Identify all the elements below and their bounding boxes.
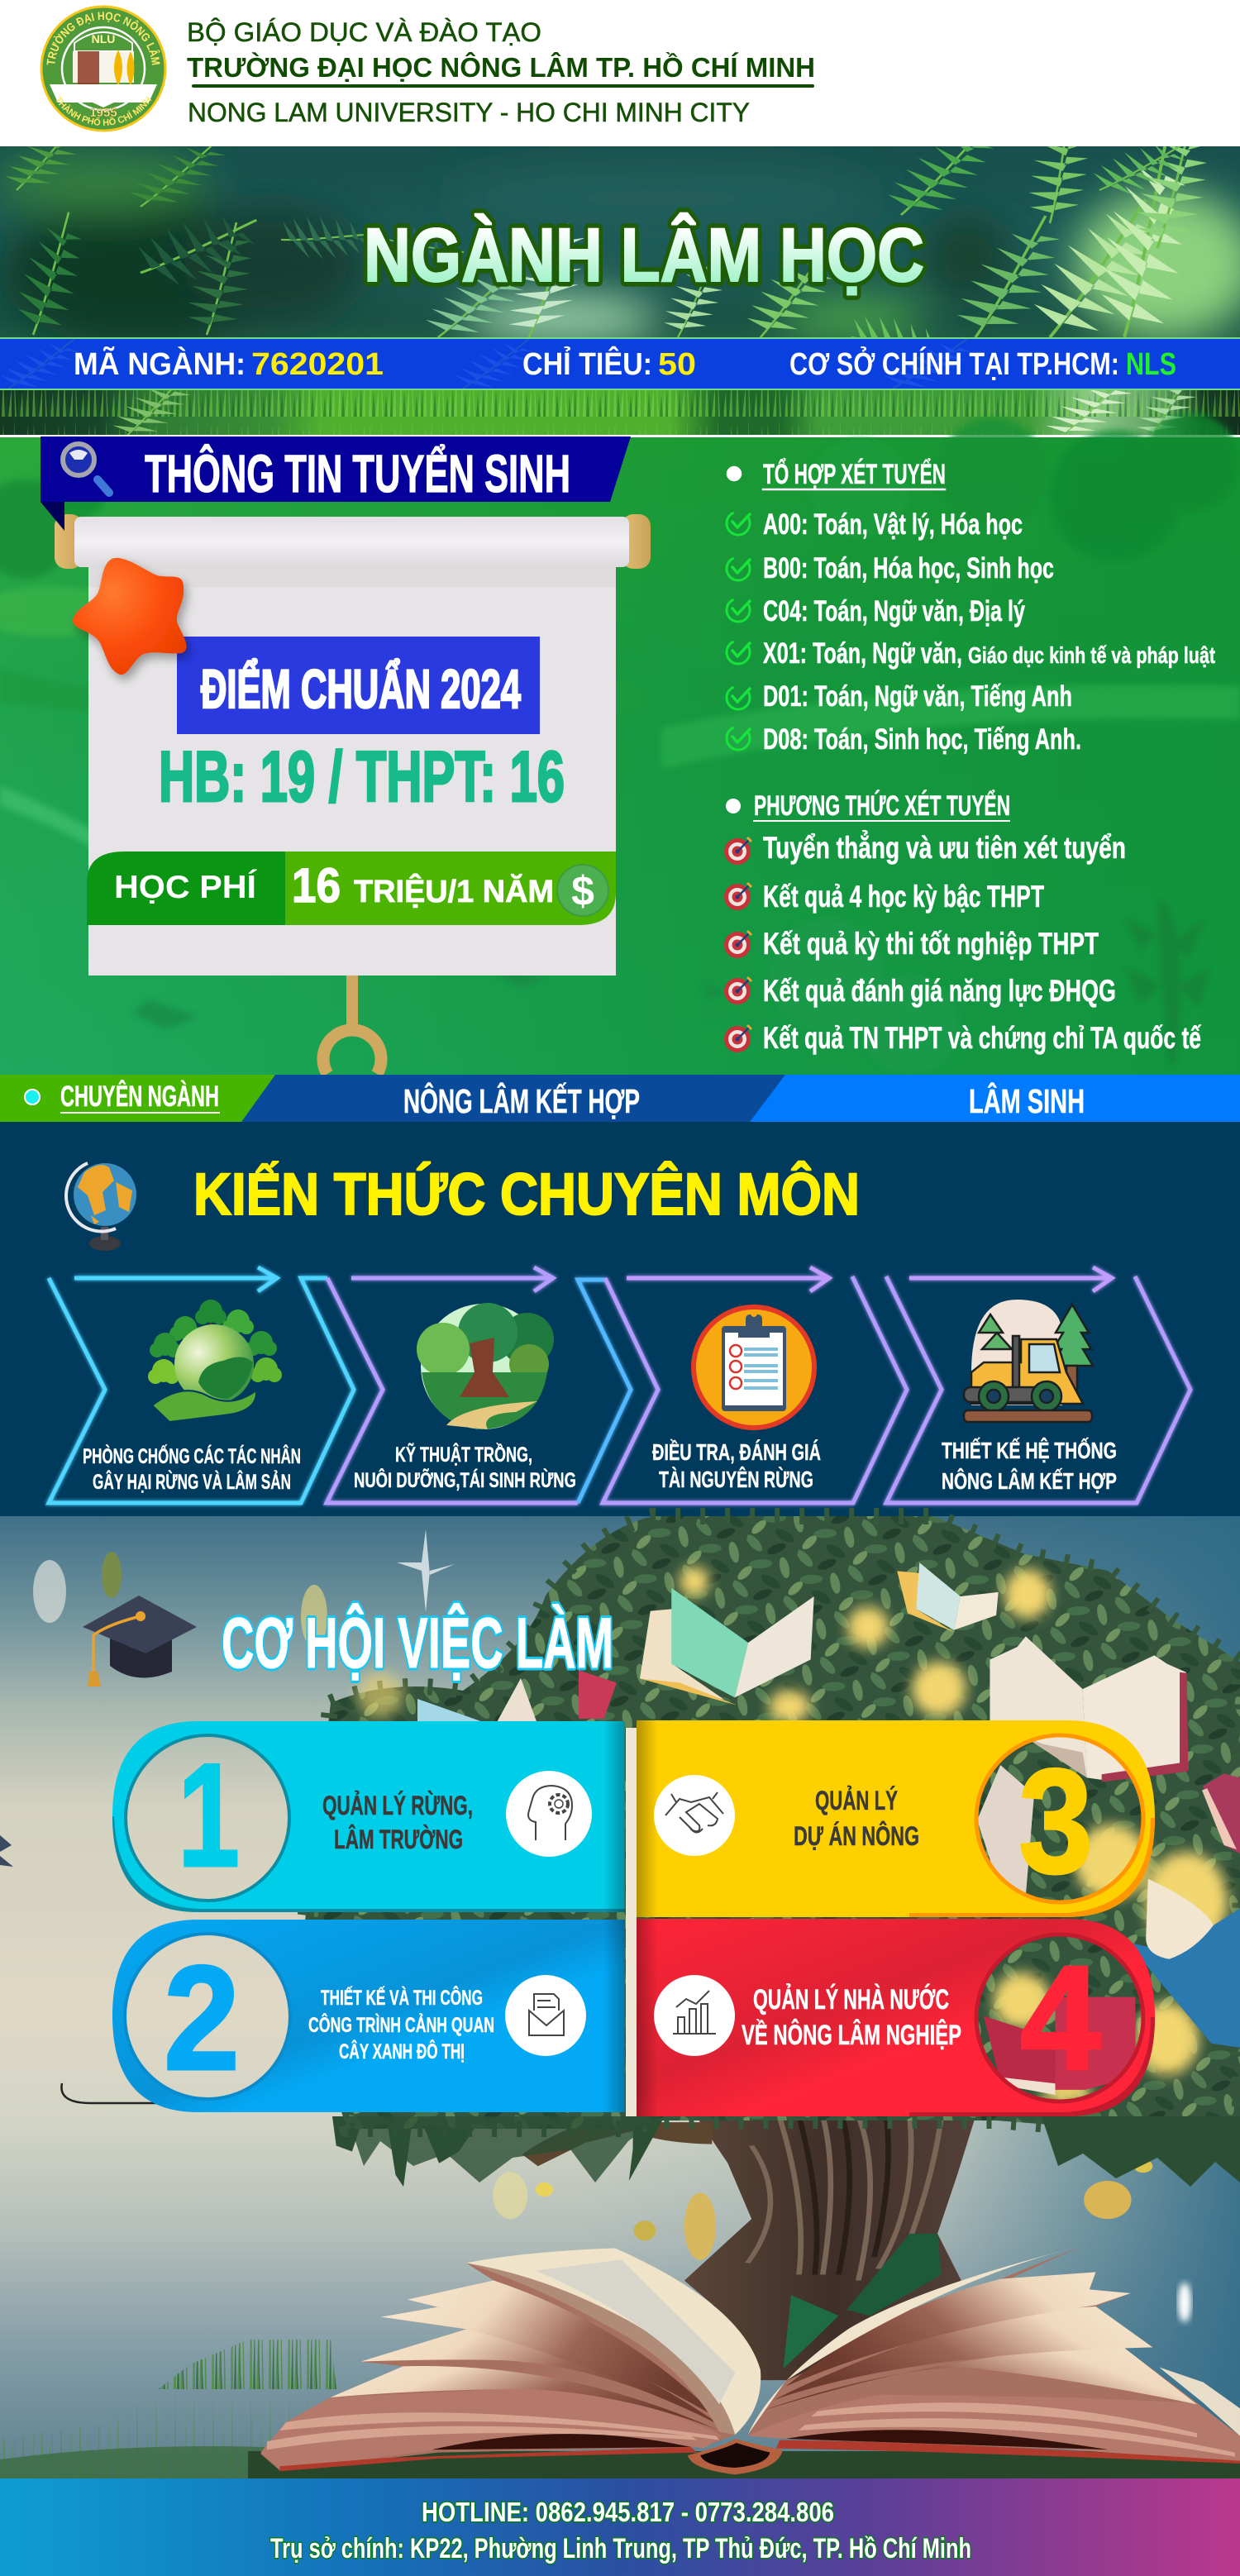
icon: graduation cap [83,1596,197,1686]
text: quota: 50 [658,347,696,382]
text: benchmark heading: ĐIỂM CHUẨN 2024 [201,658,521,719]
list: admission methods: PHƯƠNG THỨC XÉT TUYỂN [754,790,1010,822]
grass [0,2340,1240,2478]
heading: admissions ribbon: THÔNG TIN TUYỂN SINH [145,443,570,503]
numeral: 4 [1020,1935,1101,2101]
panel: programme code band [0,337,1240,390]
heading: career opportunities [222,1604,613,1683]
icon: growth chart [654,1975,735,2056]
text: LÂM TRƯỜNG [334,1825,463,1854]
text: hotline: HOTLINE: 0862.945.817 - 0773.284.806 [422,2497,834,2527]
arrow 2 [351,1267,553,1291]
panel: professional knowledge [0,1122,1240,1516]
icon: dollar coin: $ [571,868,594,914]
icon: clipboard [694,1307,814,1428]
text: quota: CHỈ TIÊU: [522,346,652,382]
panel: specializations tabs [0,1075,1240,1122]
text: programme code [74,346,384,382]
text [322,1791,473,1854]
list: admission methods: Tuyển thẳng và ưu tiên xét tuyển [763,830,1126,865]
list: subject combinations: TỔ HỢP XÉT TUYỂN [763,459,946,490]
chevron 2 [327,1278,578,1503]
icon: forest scene [417,1303,554,1429]
tree trunk and branch [332,2099,1152,2380]
icon: envelope document [505,1975,586,2056]
decorative books in tree [579,1562,1240,2095]
text: card 2 caption: NUÔI DƯỠNG,TÁI SINH RỪNG [354,1467,576,1492]
text: campus: NLS [1126,347,1176,382]
heading: admissions ribbon [41,436,631,531]
numeral: 1 [178,1733,240,1897]
tuition bar [87,852,616,925]
text: programme code: MÃ NGÀNH: [74,346,246,382]
text: card 1 caption: GÂY HẠI RỪNG VÀ LÂM SẢN [93,1469,291,1494]
card 1: forest management [112,1721,625,1912]
icon: orange star [73,558,187,675]
text: card 2 caption: KỸ THUẬT TRỒNG, [395,1442,532,1467]
icon: globe [66,1163,136,1251]
heading: knowledge: KIẾN THỨC CHUYÊN MÔN [193,1162,860,1228]
heading: career opportunities: CƠ HỘI VIỆC LÀM [222,1604,613,1683]
tuition bar: 16 [292,859,341,913]
heading: career opportunities: CƠ HỘI VIỆC LÀM [222,1604,613,1683]
blue score box [177,637,540,734]
text: QUẢN LÝ RỪNG, [322,1791,473,1820]
list: subject combinations: A00: Toán, Vật lý, Hóa học [763,508,1023,541]
header: university identity [0,5,1207,146]
icon: university logo [40,5,167,132]
text [308,1985,494,2063]
text: THIẾT KẾ VÀ THI CÔNG [321,1985,483,2010]
text: VỀ NÔNG LÂM NGHIỆP [742,2019,961,2051]
heading: english name: NONG LAM UNIVERSITY - HO CHI MINH CITY [188,98,750,127]
chevron 4 [886,1276,1190,1503]
text: card 3 caption [652,1439,821,1492]
panel: forest banner [0,106,1240,441]
text: benchmark scores: HB: 19 / THPT: 16 [159,737,565,817]
text: card 4 caption: THIẾT KẾ HỆ THỐNG [942,1437,1117,1463]
icon: dollar coin [557,865,608,916]
numeral: 2 [164,1935,240,2101]
icon: head with gear [506,1771,592,1857]
text [742,1984,961,2051]
heading: ministry: BỘ GIÁO DỤC VÀ ĐÀO TẠO [187,17,541,47]
text: DỰ ÁN NÔNG [794,1821,919,1851]
card 2: landscape design [112,1920,625,2112]
text: tab silviculture: LÂM SINH [969,1082,1085,1120]
text: card 1 caption: PHÒNG CHỐNG CÁC TÁC NHÂN [83,1443,301,1468]
footer: contact [0,2478,1240,2576]
open book on grass [260,2246,1240,2474]
numeral: 3 [1018,1739,1093,1905]
list: subject combinations: D01: Toán, Ngữ văn, Tiếng Anh [763,680,1072,713]
text: CÂY XANH ĐÔ THỊ [339,2039,465,2063]
heading: university name: TRƯỜNG ĐẠI HỌC NÔNG LÂM TP. HỒ CHÍ MINH [187,51,815,83]
list: admission methods [724,790,1201,1055]
text [794,1786,919,1851]
panel: career opportunities [0,1516,1240,2478]
list: subject combinations: X01: Toán, Ngữ văn, [763,637,962,670]
icon: tractor in forest [964,1300,1093,1422]
text: campus: CƠ SỞ CHÍNH TẠI TP.HCM: [789,346,1119,382]
text: QUẢN LÝ [815,1786,898,1815]
text: card 4 caption [942,1437,1117,1494]
heading: programme title: NGÀNH LÂM HỌC [364,212,924,298]
card 3: agricultural project management [637,1720,1155,1917]
icon: university logo: NLU [92,32,115,45]
text: tab heading: CHUYÊN NGÀNH [60,1080,219,1113]
tuition bar: TRIỆU/1 NĂM [354,873,554,909]
panel: hanging scroll [41,502,651,1074]
icon: handshake [654,1775,735,1856]
tree canopy [298,1516,1240,2133]
icon: magnifier [63,444,109,493]
text: card 4 caption: NÔNG LÂM KẾT HỢP [942,1467,1117,1494]
tuition bar: HỌC PHÍ [114,869,257,905]
heading: programme title: NGÀNH LÂM HỌC [364,212,924,298]
text: card 3 caption: ĐIỀU TRA, ĐÁNH GIÁ [652,1439,821,1465]
hanging foliage [347,2116,1240,2187]
decorative left-side books [417,1678,637,2116]
text: QUẢN LÝ NHÀ NƯỚC [753,1984,949,2015]
list: subject combinations: C04: Toán, Ngữ văn, Địa lý [763,595,1025,627]
arrow 1 [74,1267,277,1291]
list: subject combinations [722,459,1215,756]
arrow 3 [627,1267,829,1291]
icon: university logo: THÀNH PHỐ HỒ CHÍ MINH [56,96,152,126]
list: subject combinations: D08: Toán, Sinh học, Tiếng Anh. [763,723,1081,756]
text: address: Trụ sở chính: KP22, Phường Linh Trung, TP Thủ Đức, TP. Hồ Chí Minh [270,2533,971,2564]
text: programme code: 7620201 [251,347,384,382]
card 4: state management [637,1919,1155,2116]
text: card 1 caption [83,1443,301,1494]
arrow 4 [909,1267,1112,1291]
list: subject combinations: B00: Toán, Hóa học, Sinh học [763,552,1054,584]
list: admission methods: Kết quả kỳ thi tốt nghiệp THPT [763,927,1099,961]
icon: university logo: TRƯỜNG ĐẠI HỌC NÔNG LÂM [46,12,160,65]
text: CÔNG TRÌNH CẢNH QUAN [308,2012,494,2037]
icon: earth in hand [148,1300,282,1422]
rod hook [346,976,358,1033]
text: card 2 caption [354,1442,576,1492]
icon: university logo: 1955 [89,106,117,120]
list: admission methods: Kết quả đánh giá năng lực ĐHQG [763,974,1116,1008]
text: card 3 caption: TÀI NGUYÊN RỪNG [659,1467,813,1492]
sparkle [1178,2283,1191,2322]
list: admission methods: Kết quả 4 học kỳ bậc THPT [763,880,1044,914]
decorative sky details [0,1529,455,2103]
chevron 3 [603,1276,907,1503]
chevron 1 [49,1267,1190,1503]
text: tab agroforestry: NÔNG LÂM KẾT HỢP [403,1082,640,1120]
panel: admissions information [0,413,1240,1075]
